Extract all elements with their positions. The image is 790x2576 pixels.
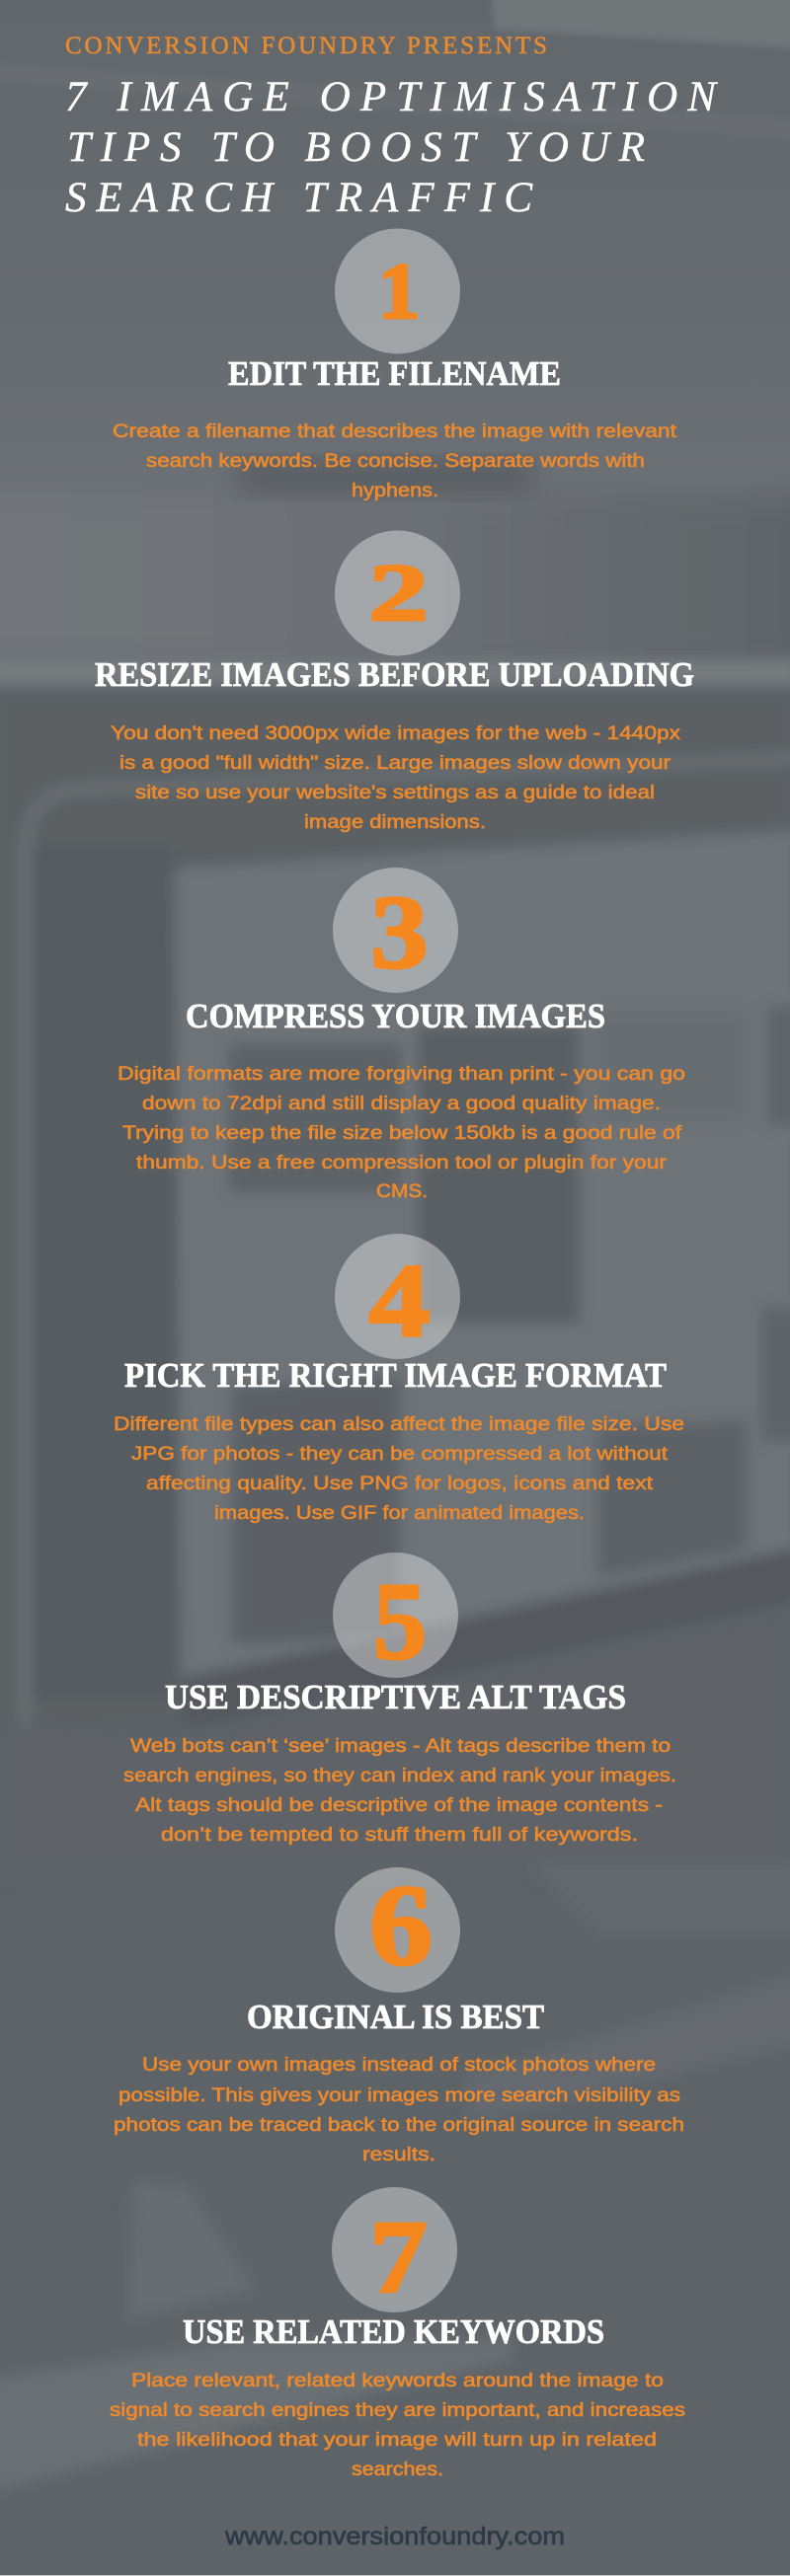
text: tip 5: don’t be tempted to stuff them full of keywords. <box>161 1824 638 1846</box>
title: SEARCH TRAFFIC <box>65 175 533 221</box>
panel: tip 6 <box>114 1862 684 2165</box>
icon: number 1: 1 <box>378 247 420 336</box>
title: 7 IMAGE OPTIMISATION <box>65 74 718 120</box>
icon: number 6: 6 <box>369 1862 433 1990</box>
text: tip 5 <box>123 1735 676 1846</box>
heading: tip 7: USE RELATED KEYWORDS <box>183 2312 604 2351</box>
icon: number 6 <box>335 1862 460 1993</box>
text: tip 2: You don't need 3000px wide images for the web - 1440px <box>111 722 680 744</box>
text: tip 6: possible. This gives your images more search visibility as <box>118 2084 680 2106</box>
text: tip 2: is a good "full width" size. Large images slow down your <box>119 752 672 774</box>
text: tip 6 <box>114 2054 684 2165</box>
title: TIPS TO BOOST YOUR <box>67 124 645 171</box>
text: tip 7: signal to search engines they are important, and increases <box>110 2399 685 2421</box>
text: tip 3: CMS. <box>376 1180 428 1202</box>
text: tip 1: Create a filename that describes the image with relevant <box>113 420 677 442</box>
text: tip 5: search engines, so they can index and rank your images. <box>123 1765 676 1786</box>
text: tip 4: JPG for photos - they can be compressed a lot without <box>131 1443 669 1465</box>
panel: tip 1 <box>113 229 677 501</box>
icon: number 1 <box>335 229 460 353</box>
heading: tip 2: RESIZE IMAGES BEFORE UPLOADING <box>95 655 694 694</box>
heading: tip 1: EDIT THE FILENAME <box>228 354 561 393</box>
panel: tip 5 <box>123 1553 676 1846</box>
text: tip 6: photos can be traced back to the original source in search <box>114 2114 684 2136</box>
text: tip 6: results. <box>362 2144 435 2165</box>
heading: tip 6: ORIGINAL IS BEST <box>247 1998 544 2036</box>
icon: number 2: 2 <box>369 547 429 638</box>
text: tip 5: Web bots can’t ‘see’ images - Alt tags describe them to <box>130 1735 671 1757</box>
text: tip 7: Place relevant, related keywords around the image to <box>131 2370 664 2391</box>
icon: number 3: 3 <box>371 874 429 990</box>
icon: number 3 <box>333 868 458 993</box>
text: tip 7: the likelihood that your image will turn up in related <box>137 2429 657 2451</box>
text: tip 3: down to 72dpi and still display a good quality image. <box>142 1093 661 1114</box>
heading: tip 4: PICK THE RIGHT IMAGE FORMAT <box>124 1356 667 1395</box>
text: tip 4: Different file types can also affect the image file size. Use <box>114 1413 684 1435</box>
text: tip 1 <box>113 420 677 501</box>
text: tip 7 <box>110 2370 685 2480</box>
icon: number 4 <box>335 1234 460 1359</box>
text: tip 4 <box>114 1413 684 1524</box>
icon: number 2 <box>335 531 460 655</box>
text: tip 1: search keywords. Be concise. Separate words with <box>146 450 645 472</box>
text: tip 3: thumb. Use a free compression tool or plugin for your <box>136 1152 668 1174</box>
icon: number 5 <box>333 1553 458 1683</box>
text: tip 3: Digital formats are more forgiving than print - you can go <box>118 1063 685 1085</box>
eyebrow: presenter: CONVERSION FOUNDRY PRESENTS <box>65 33 547 59</box>
text: tip 4: images. Use GIF for animated images. <box>214 1502 585 1524</box>
text: tip 3: Trying to keep the file size below 150kb is a good rule of <box>122 1122 682 1144</box>
text: tip 4: affecting quality. Use PNG for logos, icons and text <box>146 1473 654 1494</box>
heading: tip 3: COMPRESS YOUR IMAGES <box>186 997 605 1035</box>
text: tip 2: site so use your website's settings as a guide to ideal <box>135 782 655 803</box>
panel: tip 3 <box>118 868 685 1202</box>
icon: number 4: 4 <box>369 1243 431 1358</box>
text: tip 7: searches. <box>352 2459 443 2480</box>
icon: number 7 <box>332 2187 457 2314</box>
icon: number 5: 5 <box>373 1561 427 1683</box>
panel: tip 4 <box>114 1234 684 1524</box>
text: tip 5: Alt tags should be descriptive of the image contents - <box>135 1794 663 1816</box>
panel: tip 2 <box>95 531 694 833</box>
heading: tip 5: USE DESCRIPTIVE ALT TAGS <box>165 1678 626 1716</box>
icon: number 7: 7 <box>369 2199 427 2314</box>
panel: tip 7 <box>110 2187 685 2480</box>
text: tip 6: Use your own images instead of stock photos where <box>142 2054 656 2076</box>
text: tip 2 <box>111 722 680 833</box>
text: tip 1: hyphens. <box>352 480 438 501</box>
text: tip 3 <box>118 1063 685 1202</box>
text: tip 2: image dimensions. <box>304 811 486 833</box>
title <box>65 74 718 221</box>
footer: website url: www.conversionfoundry.com <box>224 2523 565 2550</box>
